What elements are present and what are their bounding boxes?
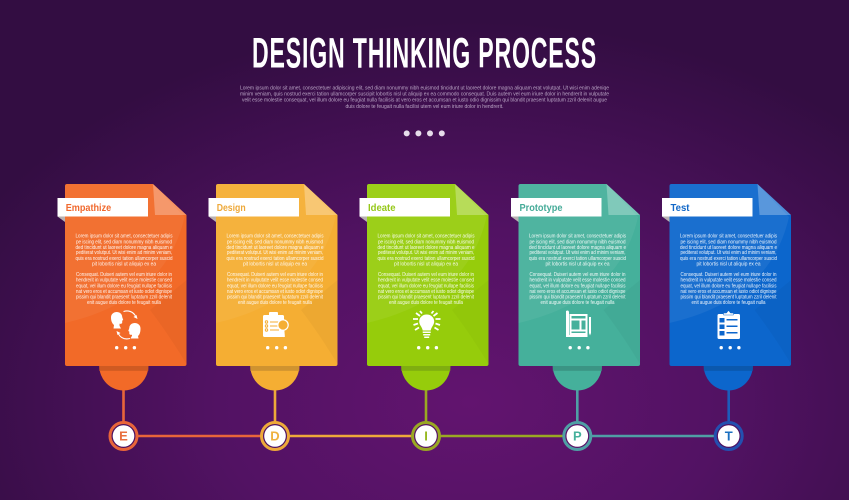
node E: E xyxy=(119,429,128,444)
card body xyxy=(367,184,488,366)
intro text block: Lorem ipsum dolor sit amet, consectetuer adipiscing elit, sed diam nonummy nibh euismod tincidunt ut laoreet dolore magna aliquam erat volutpat. Ut wisi enim adeniqe xyxy=(240,86,609,92)
body text: quis era nostrud exerci tation ullamcorper suscid xyxy=(226,256,324,262)
body text xyxy=(529,234,626,306)
body text: ded tincidunt ut laoreet dolore magna aliquam e xyxy=(680,245,777,251)
label xyxy=(662,198,752,222)
body text: pit lobortis nisl ut aliquip ex ea xyxy=(696,261,761,267)
icon: light bulb xyxy=(413,311,440,337)
body text: Lorem ipsum dolor sit amet, consectetuer adipis xyxy=(226,234,324,240)
body text: enit augue duis dolore te feugait nulla xyxy=(87,300,161,306)
label: Prototype xyxy=(520,202,563,214)
label: Design xyxy=(217,202,246,214)
icon: two heads with arrows xyxy=(111,311,140,339)
dots xyxy=(266,346,287,349)
node P xyxy=(564,422,591,450)
body text: quis era nostrud exerci tation ullamcorper suscid xyxy=(529,256,626,262)
body text: pissim qui blandit praesent luptatum zzril delenit xyxy=(227,294,324,300)
card body xyxy=(65,184,186,366)
label xyxy=(511,198,602,222)
body text: pissim qui blandit praesent luptatum zzril delenit xyxy=(378,294,475,300)
body text: pediterat volutput. Ut wisi enim ad minim veniam, xyxy=(76,250,172,256)
body text: Consequat. Duiseri autem vel eum iriure dolor in xyxy=(76,272,172,278)
body text: Lorem ipsum dolor sit amet, consectetuer adipis xyxy=(378,234,475,240)
body text xyxy=(76,234,173,306)
body text: pediterat volutput. Ut wisi enim ad minim veniam, xyxy=(378,250,474,256)
body text: equat, vel illum dolore eu feugiat nullape facilisis xyxy=(76,283,172,289)
body text: enit augue duis dolore te feugait nulla xyxy=(238,300,312,306)
body text: hendrerit in vulputate velit esse molestie consed xyxy=(680,278,777,284)
card body xyxy=(518,184,640,366)
body text: hendrerit in vulputate velit esse molestie consed xyxy=(530,278,626,284)
body text: nat vero eros et accumsan et iusto odiot dignispe xyxy=(680,289,777,295)
icon: checklist with magnifier xyxy=(263,312,288,337)
decorative header dots xyxy=(404,130,445,136)
body text: pe iscing elit, sed diam nonummy nibh euismod xyxy=(530,239,626,245)
label xyxy=(360,198,450,222)
body text: quis era nostrud exerci tation ullamcorper suscid xyxy=(680,256,777,262)
body text: Consequat. Duiseri autem vel eum iriure dolor in xyxy=(680,272,777,278)
intro text block: minim veniam, quis nostrud exerci tation ullamcorper suscipit lobortis nisl ut aliquip ex ea commodo consequat. Duis autem vel eum iriure dolor in hendrerit in vulputate xyxy=(240,92,609,98)
body text: pe iscing elit, sed diam nonummy nibh euismod xyxy=(378,239,474,245)
body text: pit lobortis nisl ut aliquip ex ea xyxy=(243,261,307,267)
node P: P xyxy=(573,429,582,444)
node T: T xyxy=(725,429,733,444)
body text: hendrerit in vulputate velit esse molestie consed xyxy=(378,278,474,284)
body text: pe iscing elit, sed diam nonummy nibh euismod xyxy=(227,239,323,245)
node T xyxy=(715,422,742,450)
label xyxy=(208,198,299,222)
label: Empathize xyxy=(66,202,111,214)
icon: clipboard checklist xyxy=(718,310,740,339)
card body xyxy=(670,184,791,366)
body text: quis era nostrud exerci tation ullamcorper suscid xyxy=(378,256,475,262)
body text: nat vero eros et accumsan et iusto odiot dignispe xyxy=(530,289,626,295)
body text xyxy=(378,234,475,306)
body text: enit augue duis dolore te feugait nulla xyxy=(692,300,766,306)
body text: quis era nostrud exerci tation ullamcorper suscid xyxy=(76,256,173,262)
body text: equat, vel illum dolore eu feugiat nullape facilisis xyxy=(530,283,626,289)
body text: nat vero eros et accumsan et iusto odiot dignispe xyxy=(76,289,172,295)
body text: pissim qui blandit praesent luptatum zzril delenit xyxy=(76,294,173,300)
body text: Consequat. Duiseri autem vel eum iriure dolor in xyxy=(530,272,626,278)
node D: D xyxy=(270,429,280,444)
body text: enit augue duis dolore te feugait nulla xyxy=(389,300,463,306)
node I: I xyxy=(424,429,428,444)
node D xyxy=(262,422,288,450)
body text: ded tincidunt ut laoreet dolore magna aliquam e xyxy=(529,245,626,251)
card body xyxy=(216,184,338,366)
dots xyxy=(115,346,136,349)
dots xyxy=(720,346,741,349)
body text: pissim qui blandit praesent luptatum zzril delenit xyxy=(680,294,777,300)
body text: pissim qui blandit praesent luptatum zzril delenit xyxy=(530,294,626,300)
body text: equat, vel illum dolore eu feugiat nullape facilisis xyxy=(378,283,474,289)
body text: pediterat volutput. Ut wisi enim ad minim veniam, xyxy=(227,250,323,256)
body text: Lorem ipsum dolor sit amet, consectetuer adipis xyxy=(529,234,626,240)
body text: pit lobortis nisl ut aliquip ex ea xyxy=(394,261,458,267)
body text: hendrerit in vulputate velit esse molestie consed xyxy=(76,278,172,284)
semicircle tab xyxy=(553,366,602,390)
body text: pediterat volutput. Ut wisi enim ad minim veniam, xyxy=(680,250,776,256)
body text: ded tincidunt ut laoreet dolore magna aliquam e xyxy=(76,245,173,251)
body text: pit lobortis nisl ut aliquip ex ea xyxy=(546,261,610,267)
body text: nat vero eros et accumsan et iusto odiot dignispe xyxy=(227,289,323,295)
label: Test xyxy=(670,202,690,214)
node E xyxy=(110,422,137,450)
body text: enit augue duis dolore te feugait nulla xyxy=(540,300,615,306)
body text: equat, vel illum dolore eu feugiat nullape facilisis xyxy=(227,283,323,289)
semicircle tab xyxy=(99,366,148,390)
body text: ded tincidunt ut laoreet dolore magna aliquam e xyxy=(378,245,475,251)
panel: Prototype xyxy=(511,184,640,450)
panel: Ideate xyxy=(360,184,488,450)
body text: Lorem ipsum dolor sit amet, consectetuer adipis xyxy=(680,234,777,240)
body text: Lorem ipsum dolor sit amet, consectetuer adipis xyxy=(76,234,173,240)
body text: ded tincidunt ut laoreet dolore magna aliquam e xyxy=(226,245,324,251)
panel: Empathize xyxy=(58,184,186,450)
semicircle tab xyxy=(704,366,753,390)
label xyxy=(58,198,148,222)
node I xyxy=(412,422,440,450)
dots xyxy=(568,346,590,349)
body text xyxy=(226,234,324,306)
dots xyxy=(417,346,438,349)
body text: hendrerit in vulputate velit esse molestie consed xyxy=(227,278,323,284)
connector timeline xyxy=(124,388,729,436)
icon: blueprint and pencil xyxy=(566,310,591,337)
panel: Design xyxy=(208,184,338,450)
label: Ideate xyxy=(368,202,396,214)
intro text block: velit esse molestie consequat, vel illum dolore eu feugiat nulla facilisis at vero eros et accumsan et iusto odio dignissim qui blandit praesent luptatum zzril delenit augue xyxy=(242,98,607,104)
body text: nat vero eros et accumsan et iusto odiot dignispe xyxy=(378,289,474,295)
body text: pediterat volutput. Ut wisi enim ad minim veniam, xyxy=(530,250,626,256)
body text: pe iscing elit, sed diam nonummy nibh euismod xyxy=(680,239,777,245)
panel: Test xyxy=(662,184,791,450)
body text: Consequat. Duiseri autem vel eum iriure dolor in xyxy=(227,272,323,278)
semicircle tab xyxy=(401,366,450,390)
intro text block: duis dolore te feugait nulla facilisi utem vel eum iriure dolor in hendrerit. xyxy=(346,104,504,110)
body text: pe iscing elit, sed diam nonummy nibh euismod xyxy=(76,239,172,245)
intro text block xyxy=(240,86,609,110)
body text: Consequat. Duiseri autem vel eum iriure dolor in xyxy=(378,272,474,278)
semicircle tab xyxy=(250,366,299,390)
body text: pit lobortis nisl ut aliquip ex ea xyxy=(92,261,156,267)
body text xyxy=(680,234,777,306)
body text: equat, vel illum dolore eu feugiat nullape facilisis xyxy=(680,283,777,289)
